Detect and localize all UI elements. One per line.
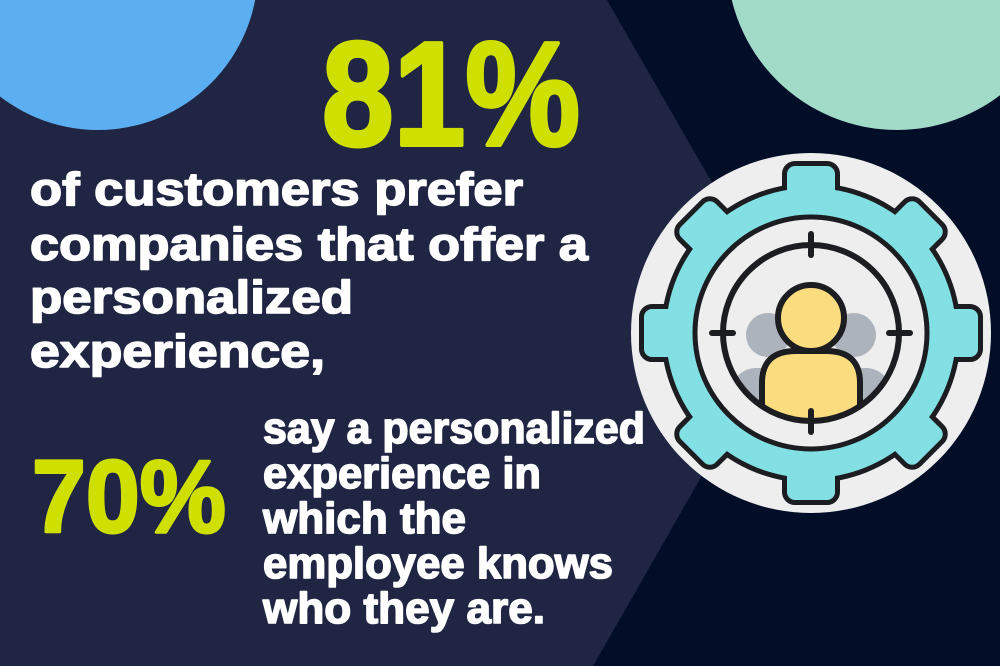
text block: employee knows: who they are. — [262, 584, 545, 633]
decorative circle: blue — [0, 0, 258, 130]
text block: employee knows: employee knows — [263, 539, 613, 588]
text block: customers prefer — [30, 163, 588, 377]
stat: 70%: 70% — [32, 439, 226, 554]
headline stat: 81%: 81% — [322, 12, 580, 177]
text block: employee knows — [262, 404, 645, 633]
text block: customers prefer: of customers prefer — [30, 163, 523, 215]
background panel: left navy — [0, 0, 791, 666]
text block: employee knows: experience in — [263, 449, 541, 498]
text block: employee knows: which the — [262, 494, 466, 543]
text block: customers prefer: experience, — [30, 325, 325, 377]
text block: employee knows: say a personalized — [263, 404, 645, 453]
text block: customers prefer: personalized — [30, 271, 353, 323]
text block: customers prefer: companies that offer a — [30, 218, 588, 270]
decorative circle: mint — [727, 0, 1000, 130]
icon: gear target person — [631, 153, 991, 513]
